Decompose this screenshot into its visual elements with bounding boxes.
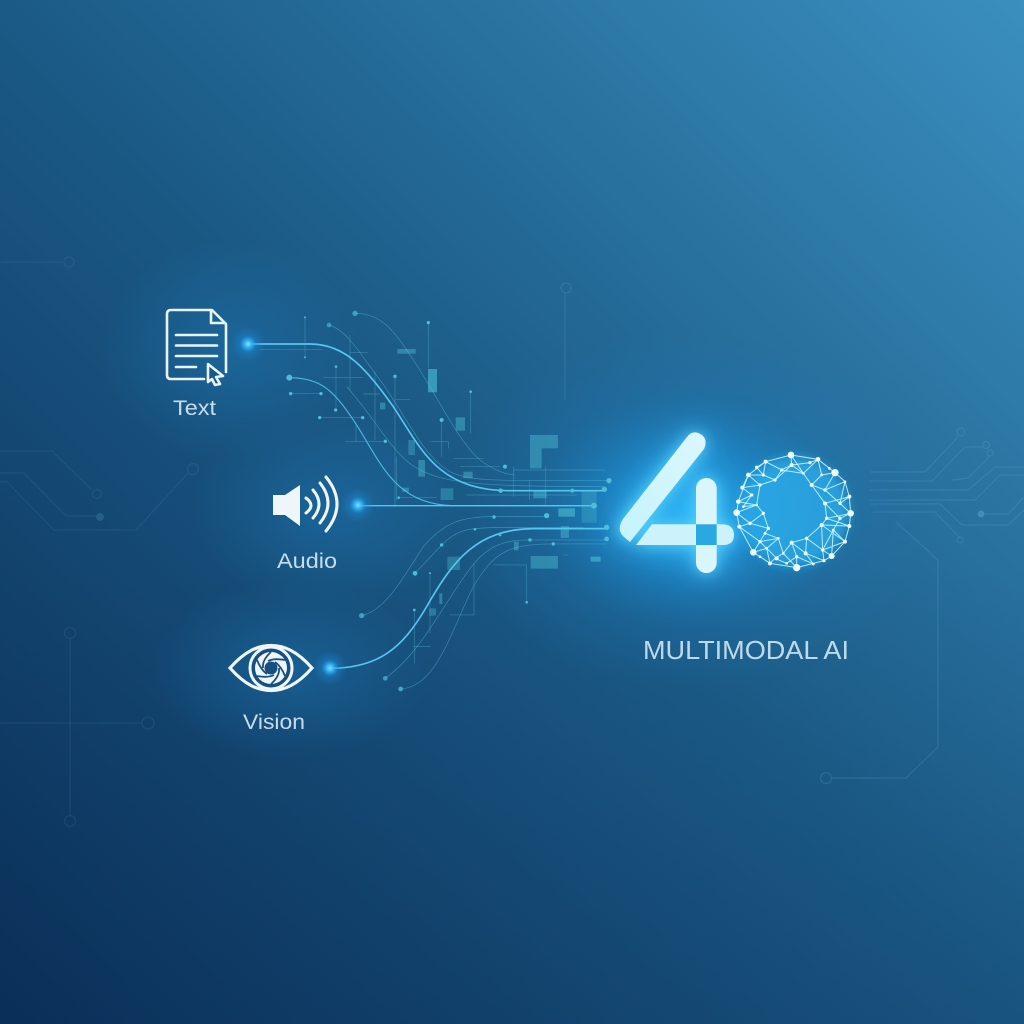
ring nodes: [733, 452, 854, 571]
label: Text: Text: [173, 397, 216, 420]
network ring o: [733, 452, 854, 571]
diagonal stroke: [620, 432, 706, 542]
ring center glow: [739, 457, 849, 567]
icon: vision eye: [230, 646, 312, 690]
numeral 4: [619, 432, 734, 573]
label: Vision: Vision: [243, 711, 305, 734]
crossbar: [636, 524, 734, 545]
faint circuit traces: right: [561, 283, 1024, 784]
glowing connector nodes: [231, 327, 375, 685]
icon: audio speaker: [273, 477, 337, 531]
soft glows behind icons: [100, 240, 470, 760]
bright streams: [248, 344, 607, 668]
glow of the 4: [619, 433, 734, 573]
center square: [696, 524, 717, 545]
thin streams: [329, 313, 608, 689]
data streams network: [248, 311, 612, 691]
faint circuit traces: left: [0, 257, 198, 826]
main glow behind 4o: [450, 330, 930, 690]
label: MULTIMODAL AI: MULTIMODAL AI: [643, 637, 849, 665]
vertical stem: [696, 478, 717, 573]
wide halo of the 4: [619, 433, 734, 573]
label: Audio: Audio: [277, 550, 337, 573]
ring links: [737, 455, 851, 568]
stream nodes: [286, 311, 612, 691]
thin grid lines: [260, 317, 605, 663]
data blocks: [380, 349, 601, 616]
icon: text document: [167, 310, 226, 385]
